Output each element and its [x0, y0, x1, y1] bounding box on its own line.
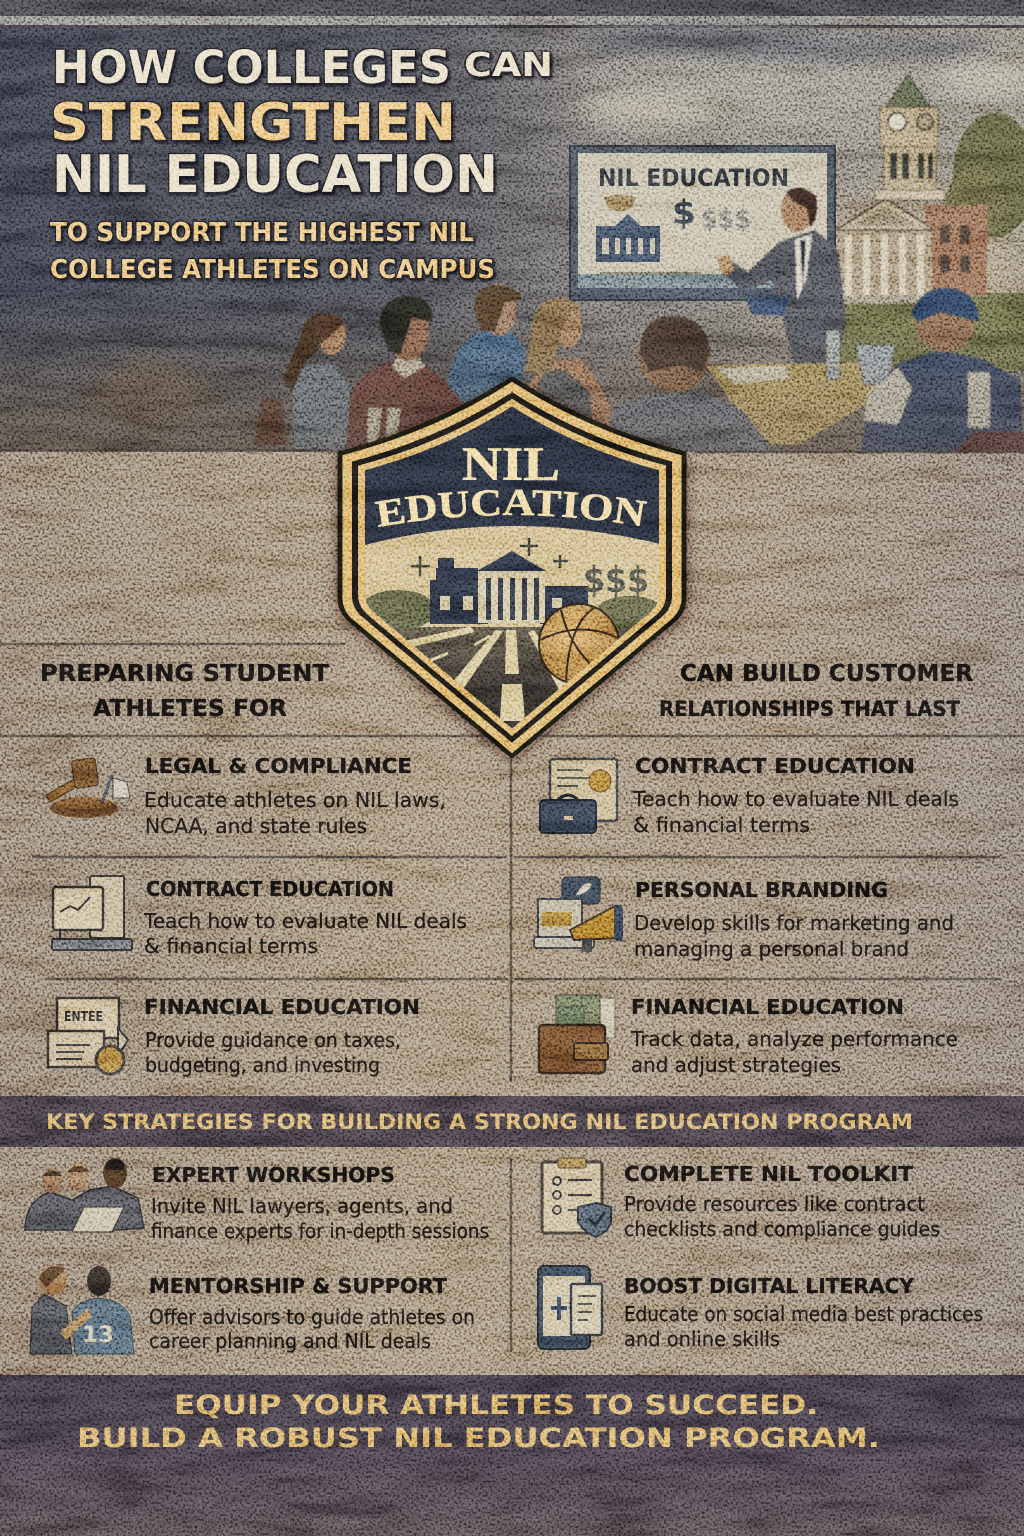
description line two: budgeting, and investing	[145, 1053, 380, 1077]
label: CONTRACT EDUCATION	[146, 877, 394, 901]
badge basketball	[539, 604, 619, 684]
panel: right feature list	[534, 754, 959, 1077]
badge road	[340, 627, 690, 745]
feature: financial education right	[539, 995, 958, 1077]
title line: nil education: NIL EDUCATION	[52, 145, 498, 205]
badge trees	[360, 590, 664, 630]
badge building	[430, 551, 588, 624]
title word: can: CAN	[464, 45, 553, 84]
banner: key strategies	[0, 1096, 1024, 1147]
description: Teach how to evaluate NIL deals	[632, 787, 959, 811]
label: MENTORSHIP & SUPPORT	[149, 1274, 447, 1298]
icon: laptop and megaphone	[534, 877, 623, 952]
illustration: athlete in maroon jersey	[346, 296, 470, 452]
subtitle line two: COLLEGE ATHLETES ON CAMPUS	[50, 255, 495, 285]
heading: customer relationships: CAN BUILD CUSTOMER	[680, 661, 973, 687]
title line: strengthen: STRENGTHEN	[50, 93, 456, 153]
illustration: athlete with ponytail	[254, 312, 352, 450]
title line: how colleges can: HOW COLLEGES	[52, 41, 451, 94]
feature: contract education	[52, 876, 467, 958]
jersey number: 13	[82, 1323, 114, 1348]
description line two: & financial terms	[144, 934, 318, 958]
panel: title block	[50, 41, 553, 285]
icon: clipboard with shield	[542, 1158, 611, 1237]
label: FINANCIAL EDUCATION	[144, 995, 420, 1019]
panel: left feature list	[46, 754, 467, 1077]
footer line one: EQUIP YOUR ATHLETES TO SUCCEED.	[174, 1390, 818, 1421]
heading line two: ATHLETES FOR	[93, 696, 287, 722]
feature: financial education	[48, 995, 420, 1077]
illustration: athlete with long hair	[524, 297, 612, 426]
icon: three experts with laptop	[25, 1158, 144, 1232]
label: FINANCIAL EDUCATION	[631, 995, 904, 1019]
description line two: checklists and compliance guides	[624, 1217, 940, 1241]
shield badge	[326, 373, 698, 768]
board dollar signs: $	[672, 193, 696, 233]
description line two: career planning and NIL deals	[149, 1329, 431, 1353]
badge dollar signs: $$$	[583, 560, 649, 601]
banner heading: KEY STRATEGIES FOR BUILDING A STRONG NIL EDUCATION PROGRAM	[46, 1110, 913, 1134]
illustration: presenter	[716, 188, 846, 364]
description line two: and online skills	[624, 1327, 780, 1351]
label: CONTRACT EDUCATION	[635, 754, 915, 778]
footer line two: BUILD A ROBUST NIL EDUCATION PROGRAM.	[77, 1423, 880, 1454]
illustration: campus building	[836, 199, 987, 304]
description line two: NCAA, and state rules	[145, 814, 367, 838]
illustration: faint shrub	[93, 357, 208, 418]
illustration: athlete in cap and varsity vest	[860, 288, 1024, 452]
feature: legal and compliance	[46, 754, 446, 838]
heading line two right: RELATIONSHIPS THAT LAST	[659, 697, 961, 721]
icon label: ENTEE	[64, 1010, 103, 1025]
icon: gavel and scales	[46, 757, 130, 818]
strategy: boost digital literacy	[538, 1266, 983, 1351]
feature: contract education right	[540, 754, 959, 837]
feature: personal branding	[534, 877, 954, 961]
illustration: presentation board: $$$	[701, 204, 751, 235]
label: PERSONAL BRANDING	[635, 878, 888, 902]
strategy: complete nil toolkit	[542, 1158, 940, 1241]
board title: NIL EDUCATION	[598, 164, 789, 192]
strategy: expert workshops	[25, 1158, 489, 1243]
panel: strategies left	[25, 1158, 489, 1354]
label: BOOST DIGITAL LITERACY	[624, 1274, 915, 1298]
footer call to action	[0, 1375, 1024, 1536]
icon: mentor and athlete 13	[30, 1265, 134, 1354]
icon: documents and coin	[48, 998, 128, 1074]
icon: computer with chart	[52, 876, 132, 950]
illustration: table with bottle and cup	[706, 330, 895, 444]
description: Invite NIL lawyers, agents, and	[151, 1194, 453, 1218]
label: LEGAL & COMPLIANCE	[145, 754, 412, 778]
illustration: athlete seen from behind	[606, 316, 772, 452]
badge title: education: EDUCATION	[374, 490, 648, 528]
description: Develop skills for marketing and	[634, 911, 954, 935]
description: Educate on social media best practices	[624, 1302, 983, 1326]
icon: contract and briefcase	[540, 759, 617, 833]
illustration: clock tower	[875, 74, 945, 200]
heading: preparing student athletes: PREPARING STUDENT	[40, 661, 329, 687]
strategy: mentorship and support	[30, 1265, 475, 1354]
icon: wallet with cash	[539, 995, 615, 1073]
section headings and dividers	[0, 450, 1024, 1082]
panel: strategies right	[538, 1158, 983, 1351]
badge banner	[340, 395, 690, 552]
badge title: nil: NIL	[462, 438, 560, 491]
label: COMPLETE NIL TOOLKIT	[624, 1162, 913, 1186]
description: Offer advisors to guide athletes on	[149, 1305, 475, 1329]
description line two: managing a personal brand	[634, 937, 909, 961]
description line two: & financial terms	[633, 813, 810, 837]
board icon: cap	[604, 194, 636, 212]
badge sparkles	[411, 538, 568, 576]
panel: hero scene	[0, 0, 1024, 452]
label: EXPERT WORKSHOPS	[152, 1163, 395, 1187]
description: Provide resources like contract	[624, 1192, 925, 1216]
board icon: building	[596, 214, 660, 262]
description: Teach how to evaluate NIL deals	[143, 909, 467, 933]
icon: phone and tablet	[538, 1266, 602, 1349]
illustration: campus tree right	[945, 113, 1024, 241]
description: Educate athletes on NIL laws,	[144, 788, 446, 812]
description: Provide guidance on taxes,	[145, 1028, 401, 1052]
description line two: and adjust strategies	[631, 1053, 841, 1077]
illustration: athlete in blue shirt	[448, 284, 525, 410]
subtitle line one: TO SUPPORT THE HIGHEST NIL	[50, 218, 474, 248]
description: Track data, analyze performance	[630, 1027, 958, 1051]
illustration: presentation board	[570, 146, 835, 300]
illustration: lawn	[820, 293, 1024, 370]
description line two: finance experts for in-depth sessions	[151, 1219, 489, 1243]
badge artwork	[340, 395, 690, 745]
